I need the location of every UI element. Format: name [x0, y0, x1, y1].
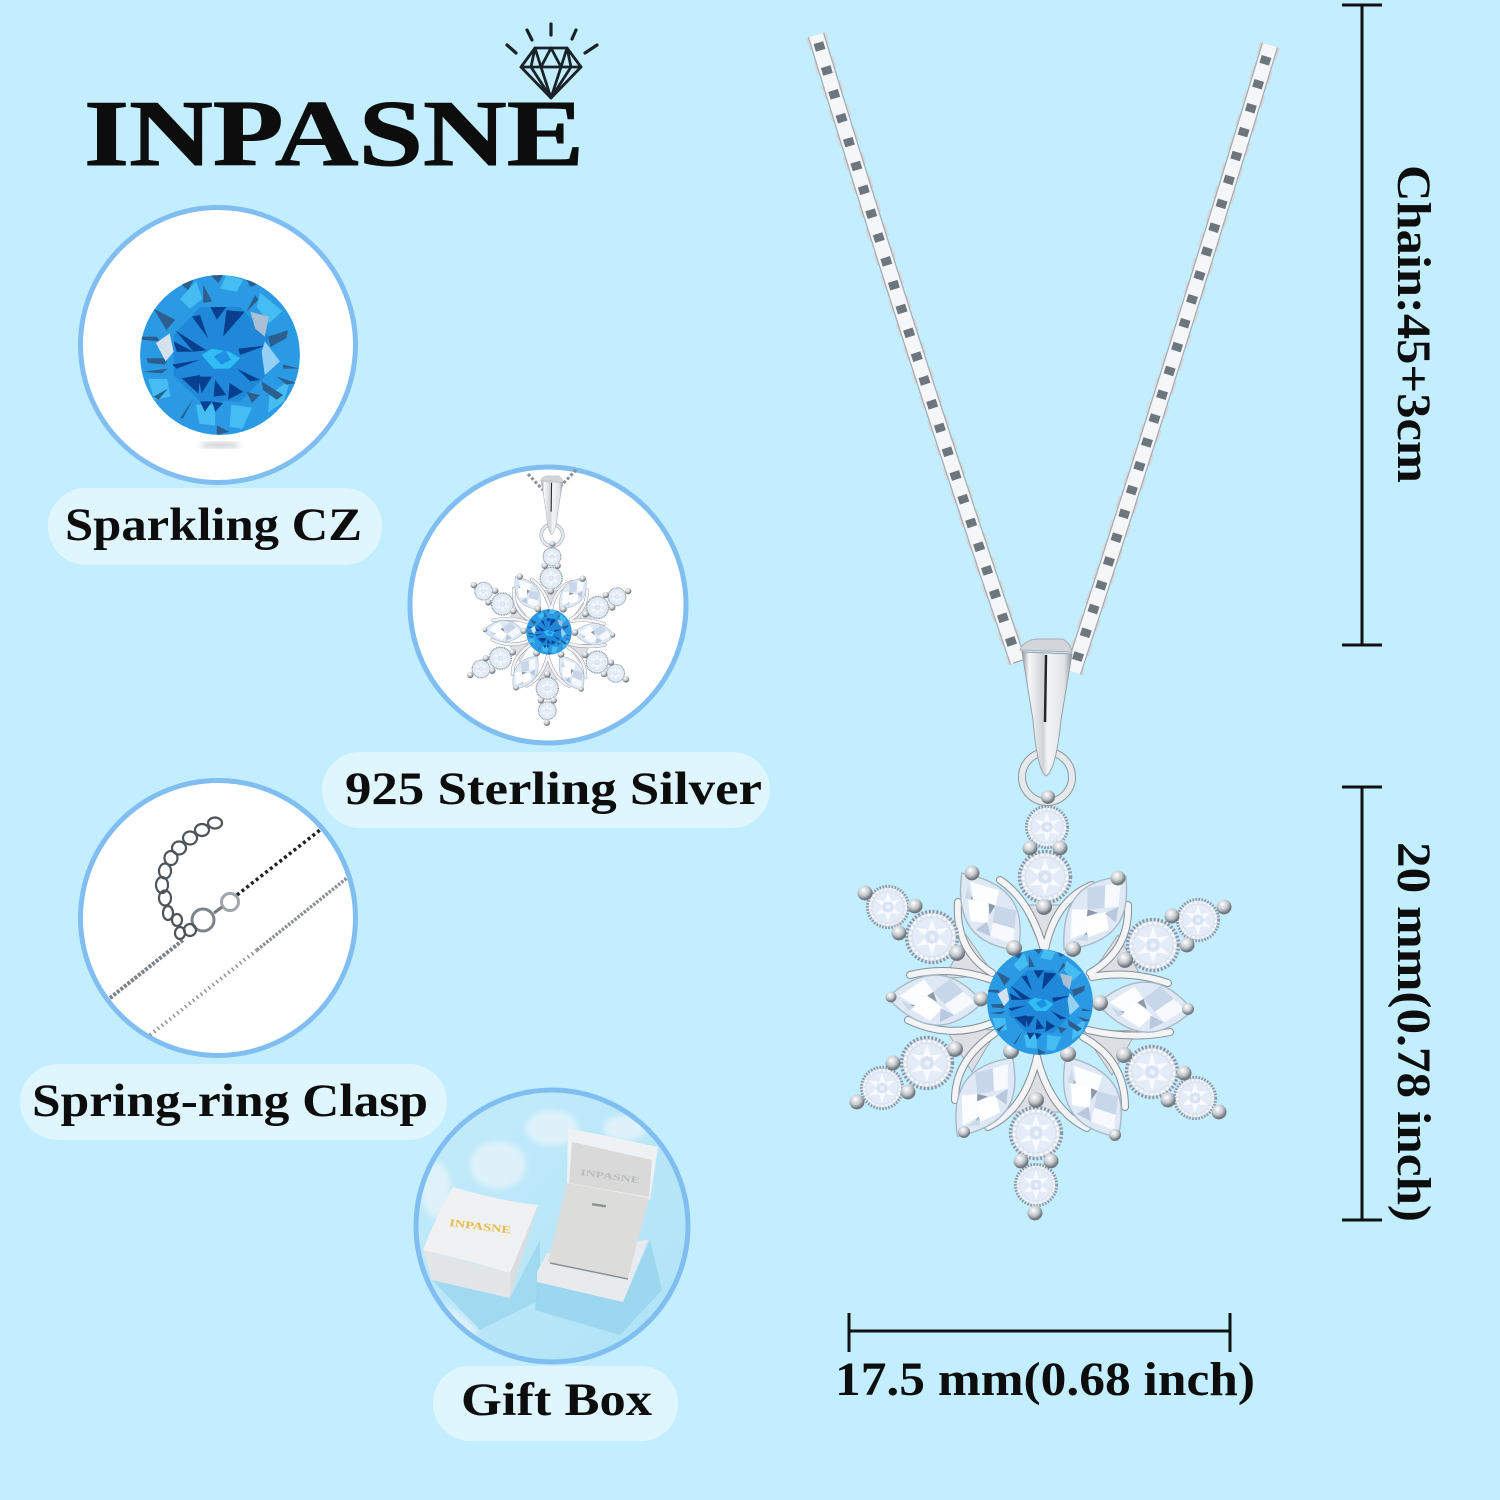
label pill	[322, 752, 770, 828]
dimension: chain length	[1342, 5, 1440, 645]
circle	[410, 467, 686, 743]
label: 925 Sterling Silver	[345, 763, 762, 815]
circle photo: INPASNE	[580, 1167, 641, 1185]
label: Spring-ring Clasp	[32, 1075, 428, 1127]
circle	[80, 780, 356, 1056]
panel: sparkling cz	[48, 208, 382, 565]
small pendant	[467, 476, 631, 726]
logo	[84, 24, 597, 186]
circle photo	[422, 1110, 686, 1360]
panel: 925 sterling silver	[322, 467, 770, 828]
circle border	[416, 1090, 688, 1362]
gem shadow	[200, 442, 240, 448]
label pill	[433, 1366, 678, 1441]
dimension: pendant height	[1342, 787, 1440, 1222]
label pill	[48, 488, 382, 565]
small chain	[528, 470, 576, 490]
label: Gift Box	[461, 1374, 653, 1426]
clasp chains	[110, 818, 347, 1035]
icon: blue gemstone	[140, 275, 300, 435]
panel: spring-ring clasp	[20, 780, 447, 1140]
icon: diamond with rays	[507, 24, 597, 98]
panel: gift box	[410, 1085, 700, 1441]
label pill	[20, 1064, 447, 1140]
dimension: pendant height: 20 mm(0.78 inch)	[1387, 842, 1440, 1222]
box chain	[816, 35, 1270, 672]
pendant bail	[1020, 639, 1072, 802]
circle	[80, 208, 356, 482]
circle photo: INPASNE	[449, 1218, 512, 1237]
snowflake pendant	[850, 790, 1232, 1220]
brand name: INPASNE	[84, 82, 584, 186]
dimension: pendant width	[835, 1313, 1255, 1406]
dimension: chain length: Chain:45+3cm	[1387, 165, 1440, 483]
dimension: pendant width: 17.5 mm(0.68 inch)	[835, 1353, 1255, 1406]
label: Sparkling CZ	[65, 499, 362, 551]
